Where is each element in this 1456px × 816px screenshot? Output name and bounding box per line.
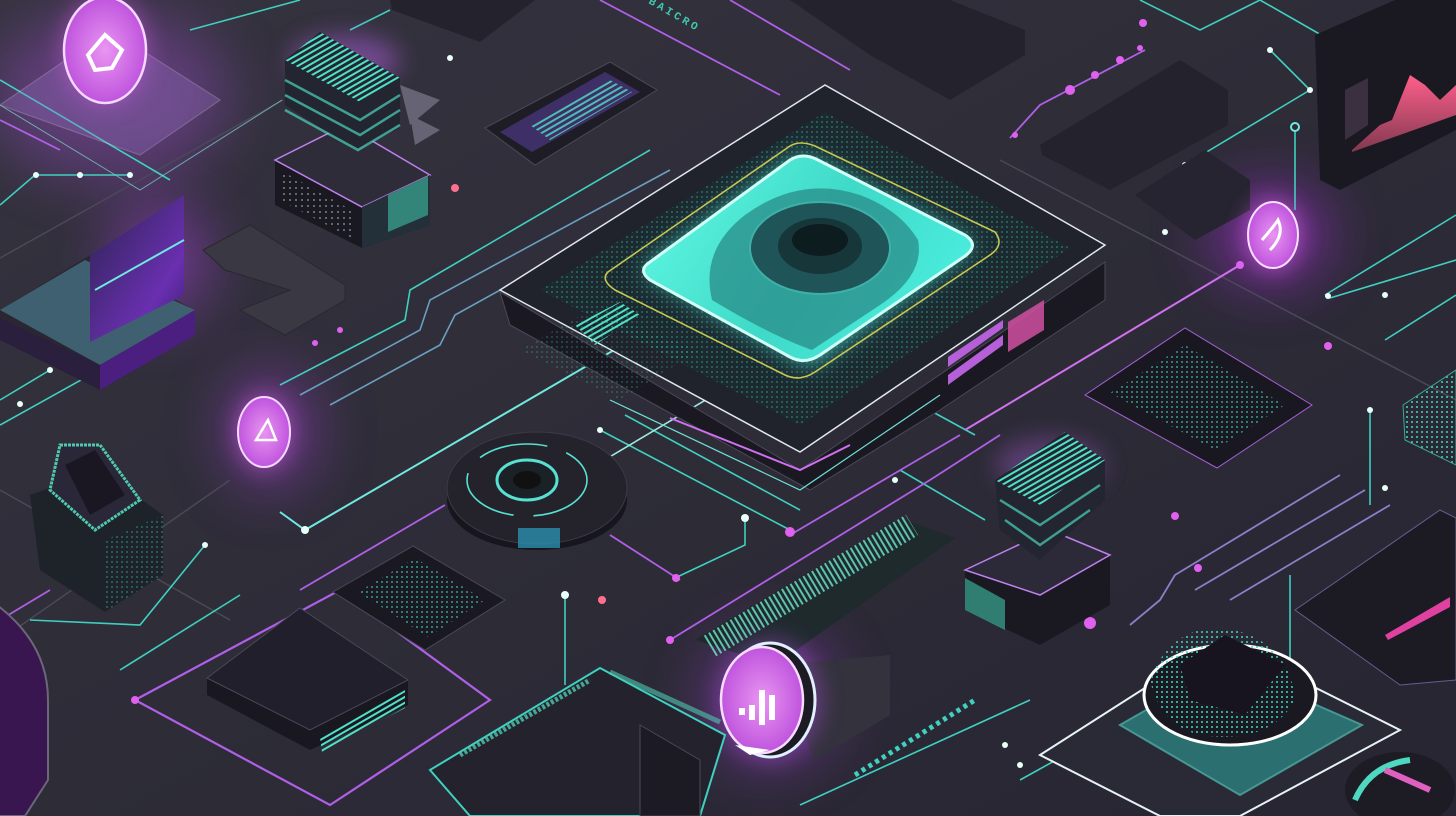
right dark panel [1295, 510, 1456, 685]
chip left grid [575, 302, 640, 345]
server stack top [275, 32, 440, 248]
right edge device [1403, 370, 1456, 465]
barcode strip [695, 518, 955, 760]
icon: pink badge left [238, 396, 290, 468]
small card top center [485, 62, 657, 165]
glow around core [643, 155, 975, 365]
chip lower edge [610, 395, 940, 490]
bottom strip [855, 700, 975, 775]
bottom-right corner device [1345, 752, 1455, 816]
chip dotted surface [540, 112, 1070, 425]
bottom-left ring [0, 600, 48, 816]
chip connectors [948, 300, 1044, 385]
lower left chip [207, 608, 408, 752]
central chip [500, 85, 1105, 490]
disc device [447, 432, 627, 550]
icon: pink badge top-left [63, 0, 147, 104]
top right chart panel [1315, 0, 1456, 190]
left cube device [30, 445, 163, 612]
glowing core [644, 156, 972, 361]
bottom-right holo platform [1040, 628, 1400, 816]
chip body [500, 85, 1105, 452]
small card center-left [333, 546, 505, 650]
bottom center panel [430, 668, 725, 816]
icon: pink badge top right [1247, 201, 1299, 269]
left monitor device [0, 195, 195, 390]
right card [1085, 328, 1312, 468]
area chart [1352, 75, 1456, 152]
top blocks [390, 0, 1250, 240]
board platform edges [0, 100, 1456, 640]
chip base side [500, 262, 1105, 490]
yellow ring [605, 143, 999, 378]
dark map shape [203, 225, 345, 335]
right server stack [965, 432, 1110, 645]
icon: large pink badge bottom [720, 640, 820, 760]
top-left floating panel [0, 0, 282, 190]
